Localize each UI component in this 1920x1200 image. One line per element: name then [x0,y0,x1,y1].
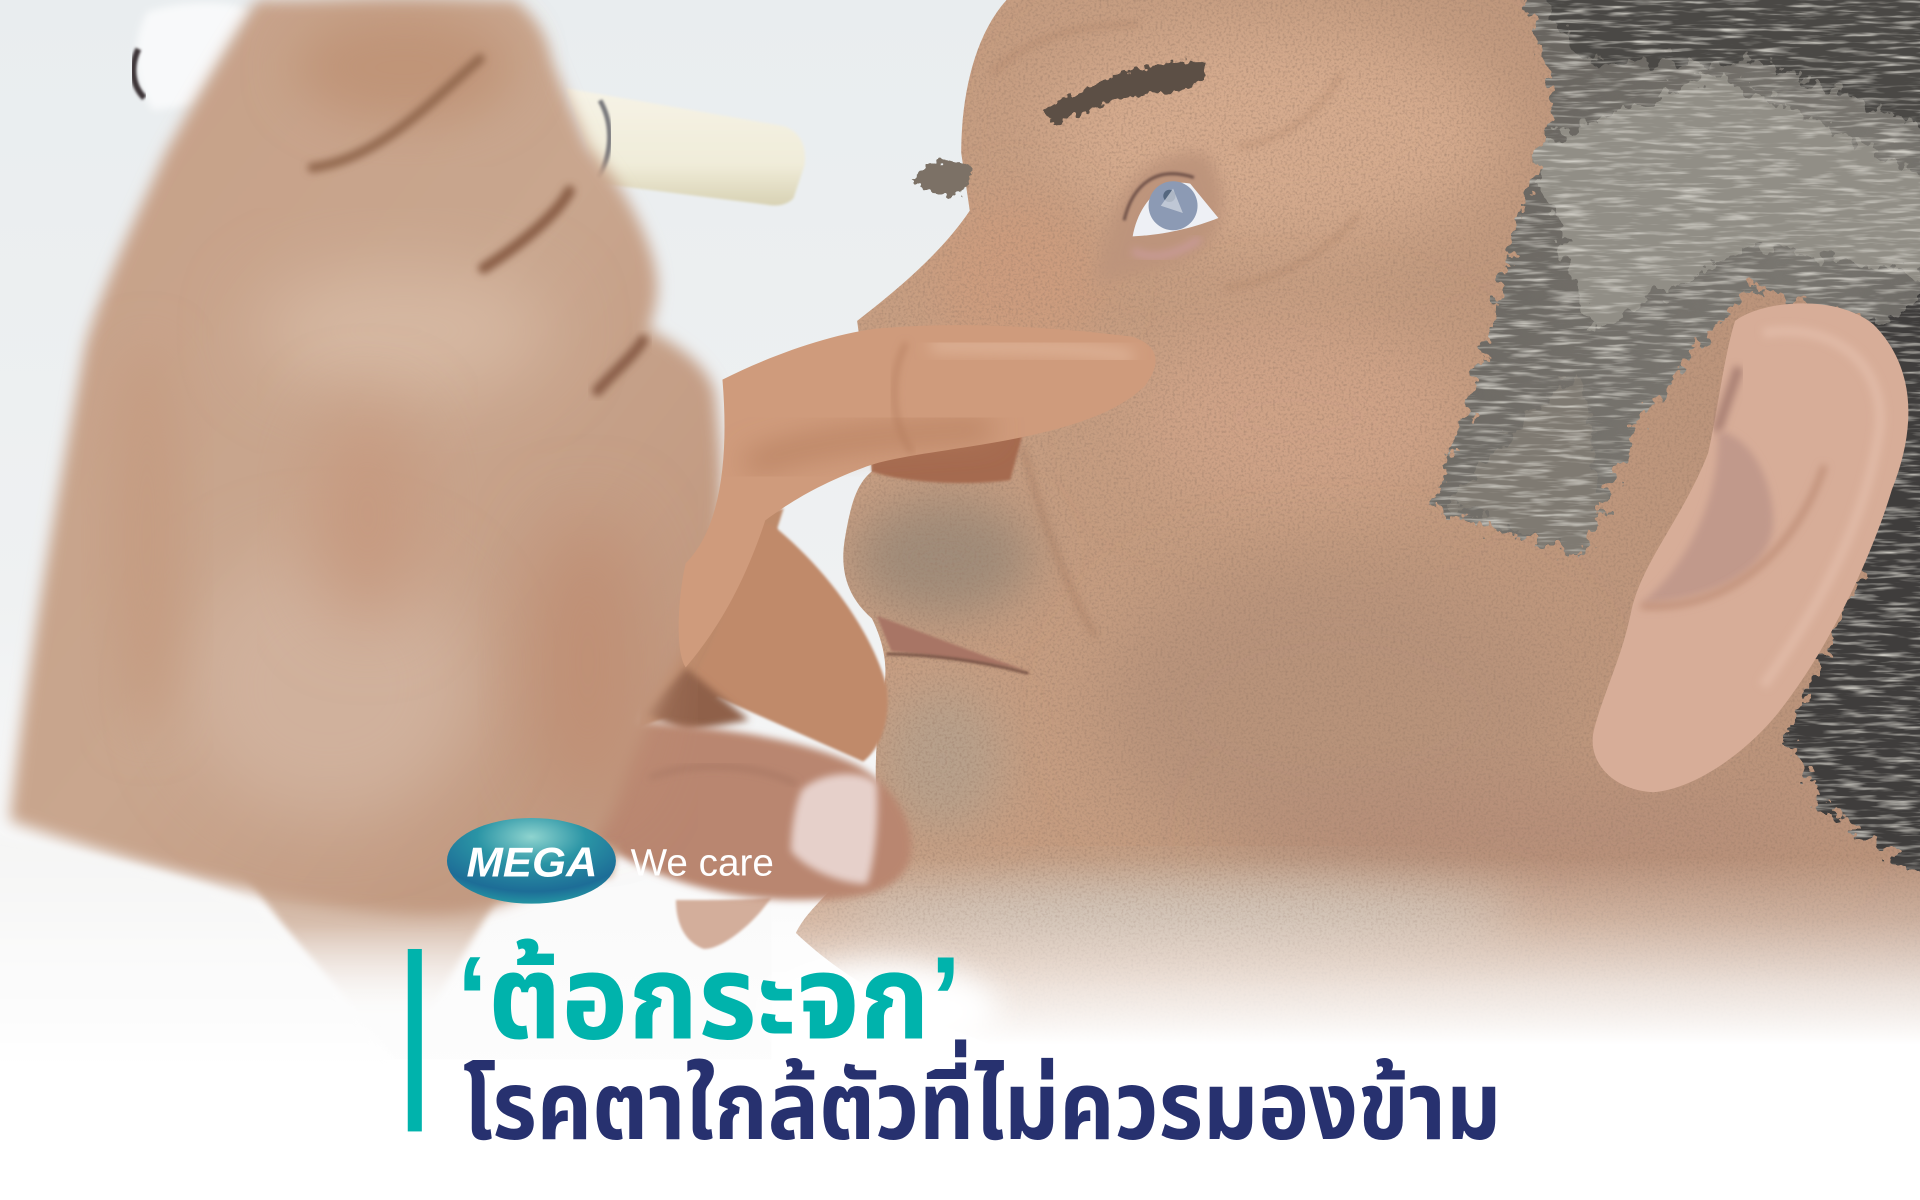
icon: eye [1096,153,1223,284]
logo badge [447,818,616,904]
logo: MEGA We care [447,818,774,904]
hair [1433,0,1920,912]
eyebrow right [1044,61,1206,127]
wrist fade [233,845,618,1022]
title [457,932,1501,1160]
eyebrow far [912,160,973,196]
title line 2: โรคตาใกล้ตัวที่ไม่ควรมองข้าม [463,1038,1501,1160]
icon: thumbnail [791,774,877,884]
photo: man's face [784,0,1920,1078]
title line 1: ‘ต้อกระจก’ [457,932,961,1063]
bottom fade of face [0,857,1920,1200]
logo wordmark: MEGA [467,839,598,886]
photo: doctor's hand [10,0,722,914]
mouth [877,616,1029,673]
ear [1593,303,1908,792]
accent bar [408,949,422,1131]
penlight [133,3,805,205]
tagline: We care [631,843,774,885]
photo: lower fingers [588,508,911,949]
photo: index finger on cheek [679,325,1156,667]
white coat [0,835,404,1078]
